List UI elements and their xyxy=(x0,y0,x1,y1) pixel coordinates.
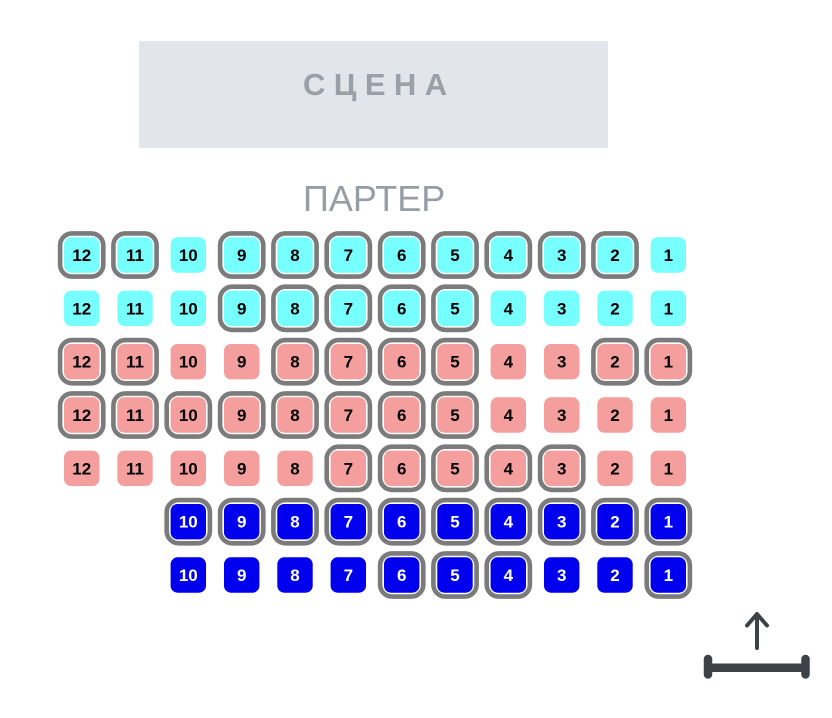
seat row 3: 5 xyxy=(450,353,460,372)
seat row 6: 5 xyxy=(450,513,460,532)
heading: parterre: ПАРТЕР xyxy=(303,178,445,219)
seat row 1: 3 xyxy=(557,246,566,265)
seat row 1: 6 xyxy=(397,246,406,265)
seat row 6: 6 xyxy=(397,513,406,532)
seat row 6: 9 xyxy=(237,513,246,532)
seat row 4: 11 xyxy=(126,406,144,425)
seat row 1: 7 xyxy=(344,246,353,265)
seat row 1: 9 xyxy=(237,246,246,265)
seat row 6: 8 xyxy=(290,513,300,532)
seat row 6: 2 xyxy=(610,513,620,532)
seat row 2: 5 xyxy=(450,299,460,318)
seat row 2: 4 xyxy=(504,299,514,318)
seat row 3: 11 xyxy=(126,353,144,372)
seat row 2: 2 xyxy=(610,299,620,318)
seat row 2: 6 xyxy=(397,299,406,318)
seat row 6: 10 xyxy=(179,513,198,532)
seat row 1: 2 xyxy=(610,246,620,265)
seat row 2: 7 xyxy=(344,299,353,318)
seat row 4: 12 xyxy=(72,406,91,425)
seat row 5: 3 xyxy=(557,459,566,478)
seat row 1: 1 xyxy=(664,246,673,265)
seat row 5: 7 xyxy=(344,459,353,478)
seat row 4: 3 xyxy=(557,406,566,425)
seat row 5: 2 xyxy=(610,459,620,478)
seat row 5: 11 xyxy=(126,459,144,478)
seat row 7: 10 xyxy=(179,566,198,585)
seat row 2: 9 xyxy=(237,299,246,318)
seat row 2: 1 xyxy=(664,299,673,318)
seat row 3: 9 xyxy=(237,353,246,372)
seat row 7: 5 xyxy=(450,566,460,585)
seat row 4: 9 xyxy=(237,406,246,425)
seat row 4: 1 xyxy=(664,406,673,425)
seat row 6: 7 xyxy=(344,513,353,532)
seat row 2: 12 xyxy=(72,299,91,318)
seat row 5: 12 xyxy=(72,459,91,478)
icon: entrance arrow and bar xyxy=(708,614,806,674)
seat row 2: 10 xyxy=(179,299,198,318)
seat row 4 xyxy=(60,393,686,437)
seat row 1: 5 xyxy=(450,246,460,265)
seat row 3: 12 xyxy=(72,353,91,372)
seat row 5: 4 xyxy=(504,459,514,478)
seat row 7 xyxy=(171,553,690,597)
seat row 7: 1 xyxy=(664,566,673,585)
seat row 6: 3 xyxy=(557,513,566,532)
seat row 5: 5 xyxy=(450,459,460,478)
seat row 3: 3 xyxy=(557,353,566,372)
seat row 3: 4 xyxy=(504,353,514,372)
seat row 4: 7 xyxy=(344,406,353,425)
seat row 2 xyxy=(64,287,686,330)
seat row 5: 10 xyxy=(179,459,198,478)
seat row 5: 1 xyxy=(664,459,673,478)
seat row 7: 6 xyxy=(397,566,406,585)
seat row 1: 8 xyxy=(290,246,300,265)
seat row 1: 10 xyxy=(179,246,198,265)
seat row 5: 9 xyxy=(237,459,246,478)
seat row 4: 4 xyxy=(504,406,514,425)
seat row 7: 2 xyxy=(610,566,620,585)
seat row 5: 8 xyxy=(290,459,300,478)
seat row 1: 12 xyxy=(72,246,91,265)
seat row 3: 10 xyxy=(179,353,198,372)
seat row 7: 3 xyxy=(557,566,566,585)
seat row 4: 2 xyxy=(610,406,620,425)
seat row 4: 6 xyxy=(397,406,406,425)
seat row 3: 1 xyxy=(664,353,673,372)
seat row 3: 7 xyxy=(344,353,353,372)
seat row 7: 4 xyxy=(504,566,514,585)
panel: stage xyxy=(139,41,608,148)
seat row 1 xyxy=(60,233,686,277)
seat row 3: 2 xyxy=(610,353,620,372)
seat row 4: 10 xyxy=(179,406,198,425)
seat row 4: 8 xyxy=(290,406,300,425)
seat row 1: 11 xyxy=(126,246,144,265)
seat row 6: 4 xyxy=(504,513,514,532)
seat row 4: 5 xyxy=(450,406,460,425)
seat row 5 xyxy=(64,447,686,490)
seat row 7: 9 xyxy=(237,566,246,585)
seat row 3: 8 xyxy=(290,353,300,372)
seat row 3: 6 xyxy=(397,353,406,372)
seat row 7: 7 xyxy=(344,566,353,585)
seat row 2: 8 xyxy=(290,299,300,318)
seat row 6: 1 xyxy=(664,513,673,532)
seat row 5: 6 xyxy=(397,459,406,478)
seat row 3 xyxy=(60,340,690,383)
heading: stage label: СЦЕНА xyxy=(303,67,455,102)
seat row 6 xyxy=(167,500,690,543)
seat row 2: 3 xyxy=(557,299,566,318)
seat row 1: 4 xyxy=(504,246,514,265)
seat row 2: 11 xyxy=(126,299,144,318)
seat row 7: 8 xyxy=(290,566,300,585)
